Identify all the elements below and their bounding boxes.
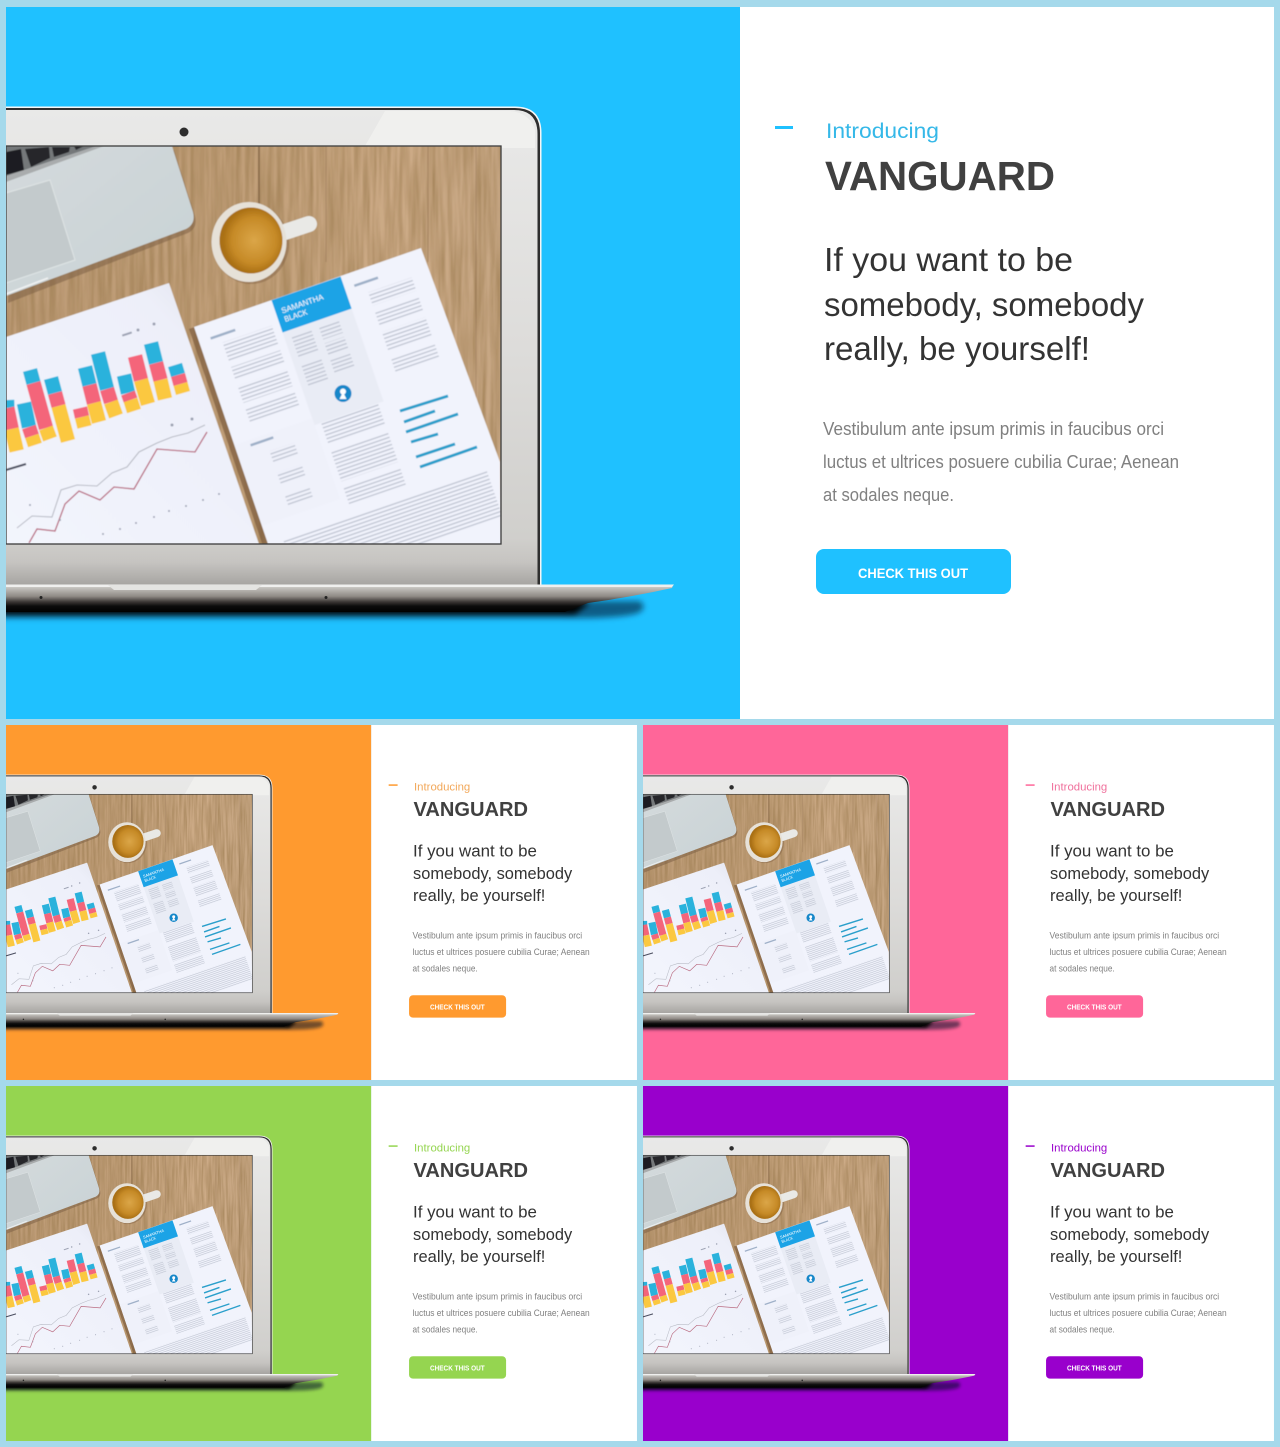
tagline: If you want to be	[824, 241, 1073, 278]
laptop mockup	[3, 775, 338, 1030]
button: CHECK THIS OUT	[430, 1366, 485, 1373]
body text: Vestibulum ante ipsum primis in faucibus orci	[823, 419, 1164, 439]
accent dash	[1026, 1145, 1035, 1147]
button	[1046, 1356, 1143, 1379]
accent dash	[389, 784, 398, 786]
slide: pink	[640, 725, 1274, 1080]
colour panel	[643, 725, 1008, 1080]
tagline: really, be yourself!	[413, 887, 545, 905]
tagline	[413, 1204, 573, 1266]
accent dash	[389, 1145, 398, 1147]
tagline: somebody, somebody	[413, 865, 573, 883]
tagline	[1050, 1204, 1210, 1266]
body text	[413, 930, 590, 973]
button	[409, 1356, 506, 1379]
button	[1046, 995, 1143, 1018]
text panel	[740, 7, 1274, 719]
body text: at sodales neque.	[413, 1324, 478, 1334]
body text: at sodales neque.	[413, 963, 478, 973]
button: CHECK THIS OUT	[1067, 1366, 1122, 1373]
accent dash	[1026, 784, 1035, 786]
tagline: really, be yourself!	[413, 1248, 545, 1266]
text panel	[371, 725, 637, 1080]
colour panel	[6, 725, 371, 1080]
tagline: really, be yourself!	[1050, 1248, 1182, 1266]
body text: Vestibulum ante ipsum primis in faucibus orci	[413, 1291, 582, 1301]
tagline: really, be yourself!	[1050, 887, 1182, 905]
body text: at sodales neque.	[1050, 963, 1115, 973]
body text	[823, 419, 1179, 505]
body text: Vestibulum ante ipsum primis in faucibus orci	[413, 930, 582, 940]
tagline: If you want to be	[1050, 843, 1174, 861]
button: CHECK THIS OUT	[1067, 1005, 1122, 1012]
laptop mockup	[640, 1136, 975, 1391]
tagline: If you want to be	[413, 843, 537, 861]
laptop mockup	[0, 106, 674, 618]
tagline: If you want to be	[1050, 1204, 1174, 1222]
body text: luctus et ultrices posuere cubilia Curae; Aenean	[823, 452, 1179, 472]
heading: VANGUARD	[414, 1160, 528, 1182]
colour panel	[6, 7, 740, 719]
text panel	[371, 1086, 637, 1441]
body text: at sodales neque.	[823, 485, 954, 505]
tagline: somebody, somebody	[1050, 1226, 1210, 1244]
tagline	[413, 843, 573, 905]
tagline	[824, 241, 1144, 367]
slide: blue hero	[0, 7, 1274, 719]
colour panel	[643, 1086, 1008, 1441]
slide: orange	[3, 725, 637, 1080]
tagline	[1050, 843, 1210, 905]
tagline: somebody, somebody	[413, 1226, 573, 1244]
text panel	[1008, 725, 1274, 1080]
accent dash	[775, 126, 793, 129]
heading: VANGUARD	[1051, 799, 1165, 821]
heading: VANGUARD	[825, 153, 1055, 199]
heading: VANGUARD	[414, 799, 528, 821]
tagline: somebody, somebody	[1050, 865, 1210, 883]
button	[409, 995, 506, 1018]
eyebrow: Introducing	[826, 119, 939, 143]
colour panel	[6, 1086, 371, 1441]
tagline: If you want to be	[413, 1204, 537, 1222]
button	[816, 549, 1011, 594]
slide: purple	[640, 1086, 1274, 1441]
body text: at sodales neque.	[1050, 1324, 1115, 1334]
body text: Vestibulum ante ipsum primis in faucibus orci	[1050, 1291, 1219, 1301]
body text: luctus et ultrices posuere cubilia Curae; Aenean	[1050, 947, 1227, 957]
slide: green	[3, 1086, 637, 1441]
body text: luctus et ultrices posuere cubilia Curae; Aenean	[413, 1308, 590, 1318]
body text	[413, 1291, 590, 1334]
button: CHECK THIS OUT	[430, 1005, 485, 1012]
body text: Vestibulum ante ipsum primis in faucibus orci	[1050, 930, 1219, 940]
laptop mockup	[640, 775, 975, 1030]
tagline: really, be yourself!	[824, 330, 1090, 367]
body text	[1050, 930, 1227, 973]
heading: VANGUARD	[1051, 1160, 1165, 1182]
tagline: somebody, somebody	[824, 286, 1144, 323]
eyebrow: Introducing	[414, 781, 470, 793]
eyebrow: Introducing	[1051, 1142, 1107, 1154]
body text	[1050, 1291, 1227, 1334]
body text: luctus et ultrices posuere cubilia Curae; Aenean	[413, 947, 590, 957]
button: CHECK THIS OUT	[858, 565, 968, 581]
eyebrow: Introducing	[1051, 781, 1107, 793]
text panel	[1008, 1086, 1274, 1441]
laptop mockup	[3, 1136, 338, 1391]
body text: luctus et ultrices posuere cubilia Curae; Aenean	[1050, 1308, 1227, 1318]
eyebrow: Introducing	[414, 1142, 470, 1154]
